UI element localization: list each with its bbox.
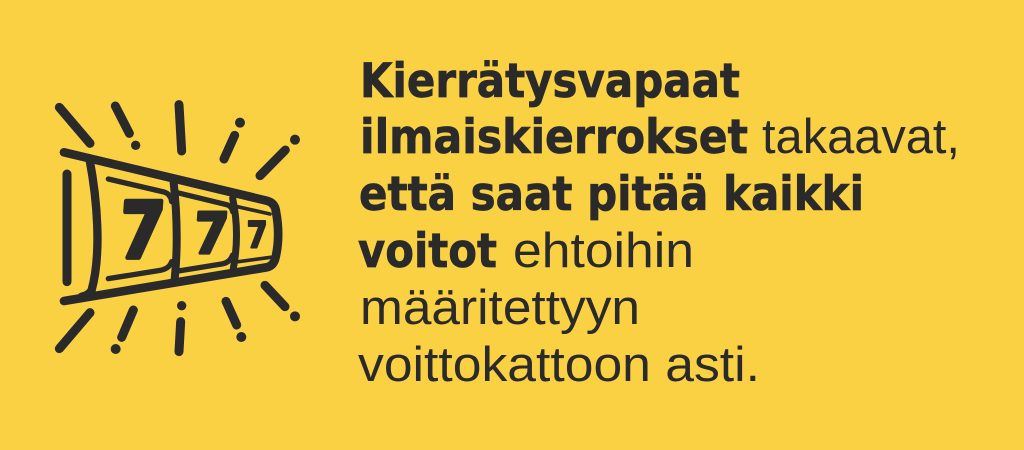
icon: sevens: 7 <box>192 202 231 267</box>
text block: main message <box>358 54 960 392</box>
icon: reel frame <box>64 152 278 301</box>
text block: main message: takaavat, <box>762 110 960 164</box>
icon: light rays <box>59 105 300 354</box>
text block: main message: ilmaiskierrokset <box>360 110 748 165</box>
icon: sevens: 7 <box>116 186 168 276</box>
text block: main message: että saat pitää kaikki <box>359 167 864 222</box>
icon: sevens <box>116 186 268 276</box>
icon: sevens: 7 <box>247 213 268 256</box>
text block: main message: voitot <box>358 224 497 279</box>
icon: slot machine reels with light rays <box>59 105 300 354</box>
text block: main message: voittokattoon asti. <box>358 338 760 392</box>
text block: main message: ehtoihin <box>513 224 694 278</box>
text block: main message: Kierrätysvapaat <box>360 54 740 109</box>
text block: main message: määritettyyn <box>360 281 640 335</box>
